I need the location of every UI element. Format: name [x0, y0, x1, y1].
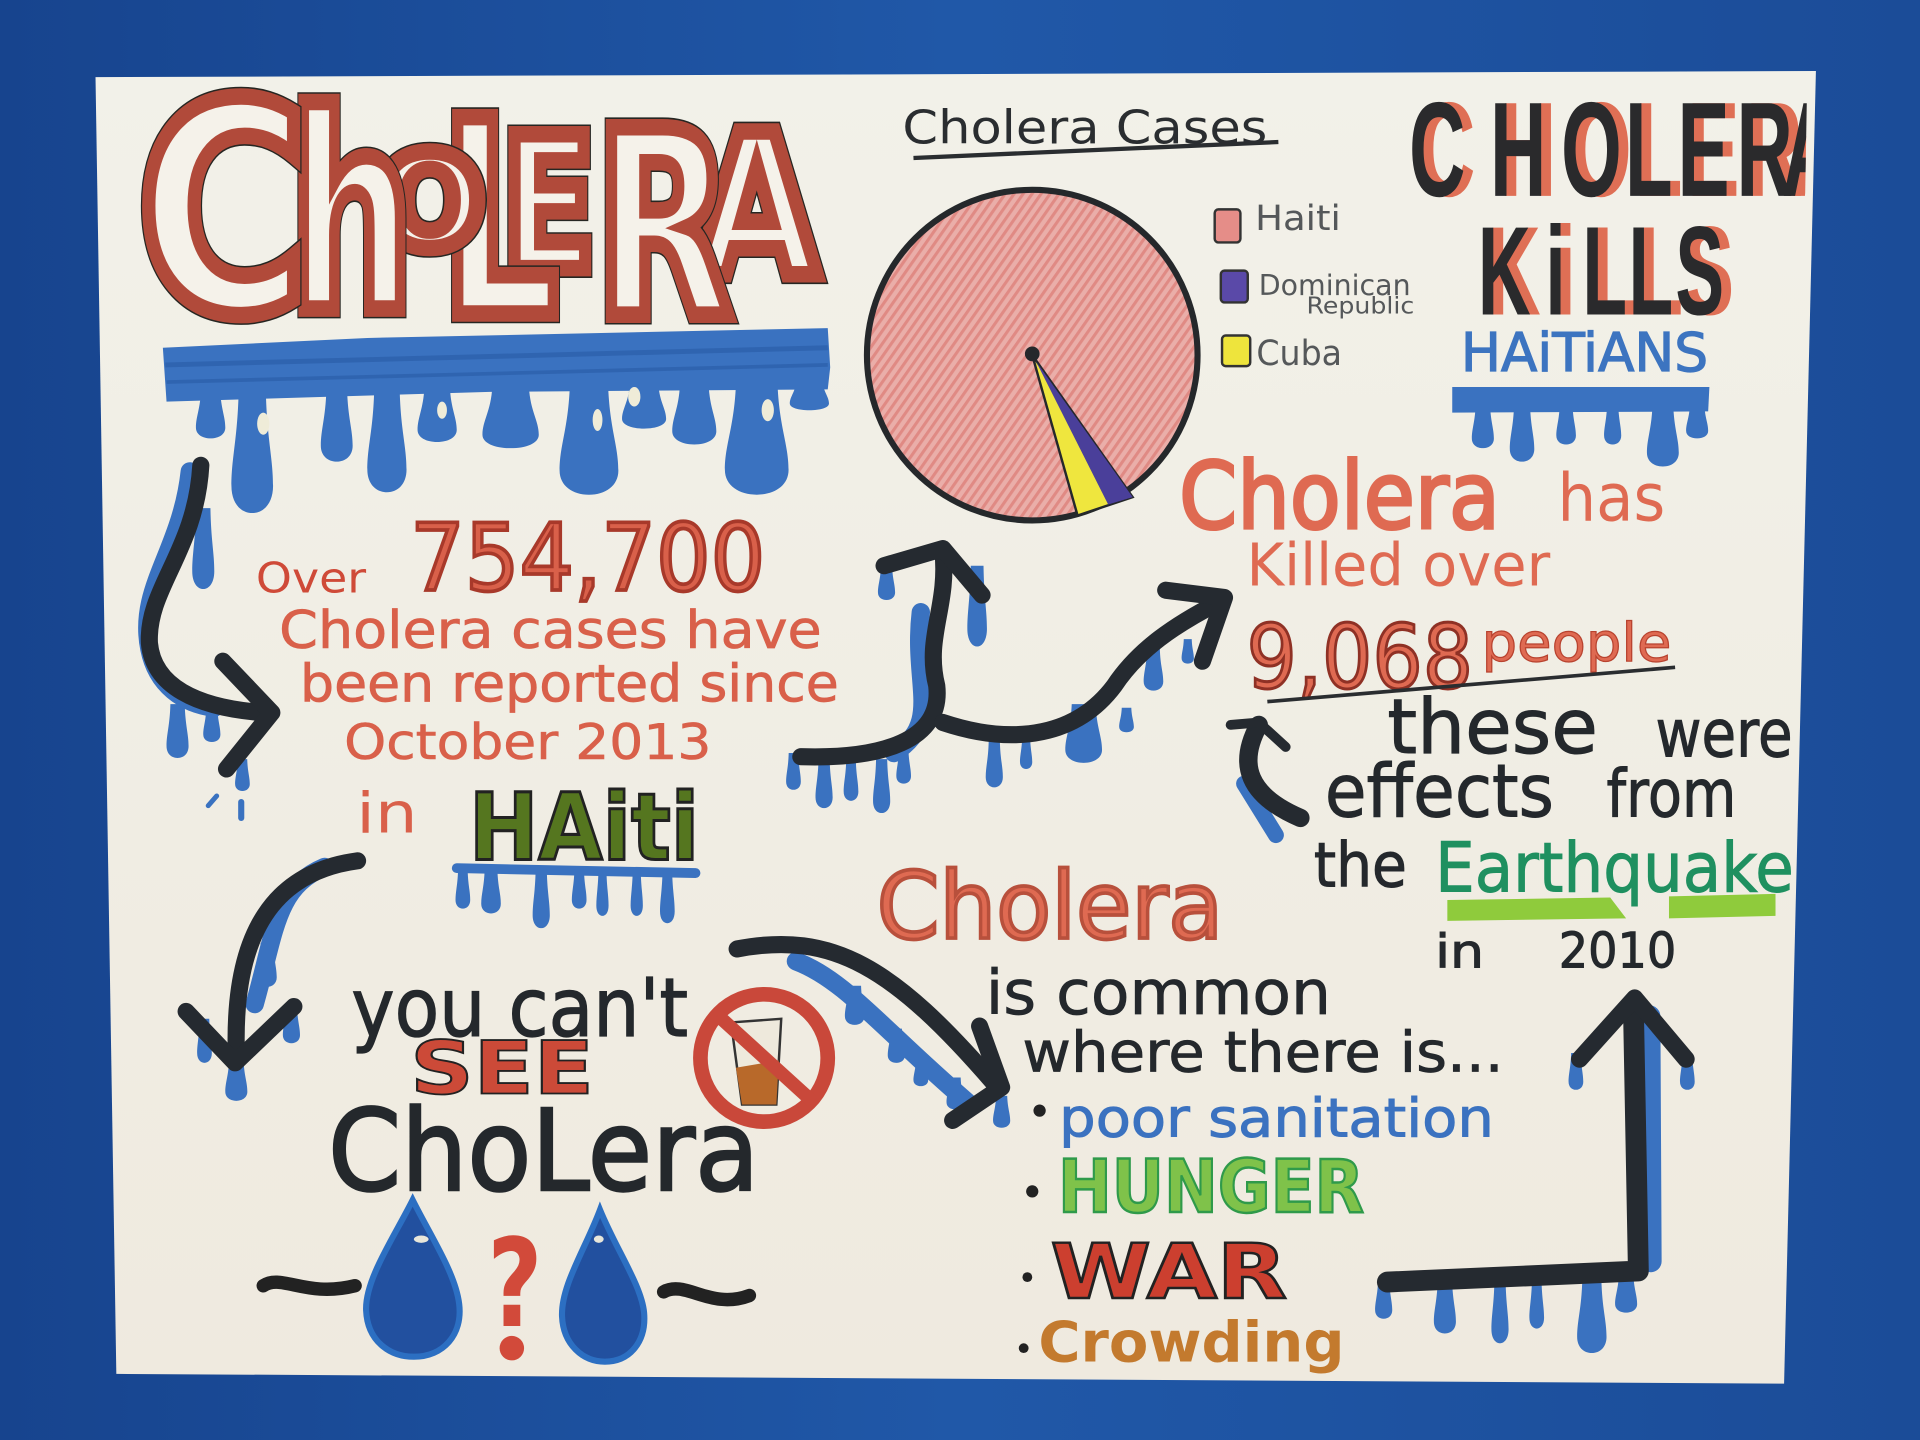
- headline: Cholera kills Haitians: KiLLS: [1488, 201, 1734, 342]
- pie chart: cholera cases: [867, 190, 1198, 520]
- icon: water drops with question mark: [263, 1200, 749, 1362]
- headline: Cholera kills Haitians: CHOLERA: [1409, 75, 1838, 225]
- text: you can't see cholera: you can't: [351, 962, 688, 1056]
- text: cholera is common where there is: is common: [986, 958, 1331, 1029]
- text: these were effects from the Earthquake in 2010: these: [1387, 683, 1598, 771]
- text: these were effects from the Earthquake in 2010: [1314, 683, 1794, 979]
- text: cholera is common where there is: where there is...: [1022, 1020, 1504, 1085]
- text: these were effects from the Earthquake in 2010: were: [1656, 696, 1793, 773]
- heading: Cholera Cases: Cholera Cases: [902, 100, 1267, 154]
- title: Cholera: h: [289, 58, 414, 374]
- arrow: top left curved: [147, 465, 272, 818]
- title: Cholera: E: [502, 99, 595, 312]
- arrow: bottom right upward: [1375, 998, 1695, 1353]
- text: over 754,700 cholera cases: Cholera cases have: [279, 601, 822, 661]
- text: you can't see cholera: SEE: [410, 1026, 594, 1111]
- arrow: centre curved to list: [737, 944, 1010, 1128]
- text: over 754,700 cholera cases: in: [356, 782, 418, 847]
- list: conditions: HUNGER: [1058, 1145, 1364, 1230]
- text: over 754,700 cholera cases: October 2013: [344, 714, 711, 771]
- text: these were effects from the Earthquake in 2010: in: [1435, 924, 1484, 978]
- blue dripping bar under Haitians: [1452, 387, 1709, 467]
- title: Cholera: R: [595, 76, 732, 376]
- title: Cholera: A: [696, 93, 818, 321]
- headline: Cholera kills Haitians: HAiTiANS: [1461, 321, 1708, 384]
- text: Cholera has killed over 9,068 people: [1179, 442, 1675, 709]
- title: Cholera: A: [696, 93, 818, 321]
- text: these were effects from the Earthquake in 2010: Earthquake: [1435, 828, 1794, 908]
- title: Cholera: L: [441, 63, 558, 377]
- text: you can't see cholera: ChoLera: [328, 1085, 759, 1217]
- text: Cholera has killed over 9,068 people: Killed over: [1247, 530, 1551, 599]
- text: Cholera has killed over 9,068 people: people: [1482, 611, 1671, 674]
- blue dripping bar under Haiti: [456, 868, 696, 928]
- title: Cholera: E: [502, 99, 595, 312]
- title: Cholera: h: [289, 58, 414, 374]
- text: over 754,700 cholera cases: Over: [256, 554, 367, 603]
- list: conditions: Crowding: [1038, 1311, 1344, 1376]
- list: conditions: poor sanitation: [1059, 1086, 1494, 1149]
- list: conditions: WAR: [1051, 1228, 1287, 1316]
- title: Cholera: R: [595, 76, 732, 376]
- legend: [1215, 199, 1414, 374]
- arrow: middle wavy up: [786, 549, 987, 813]
- text: over 754,700 cholera cases: [256, 504, 839, 847]
- text: over 754,700 cholera cases: been reported since: [300, 655, 839, 715]
- headline: Cholera kills Haitians: [1412, 102, 1807, 373]
- title: Cholera: C: [137, 44, 309, 380]
- headline: Cholera kills Haitians: KiLLS: [1478, 201, 1724, 342]
- arrow: middle wavy right: [943, 590, 1224, 787]
- arrow: lower left down: [186, 861, 358, 1101]
- blue dripping bar under title: [163, 328, 830, 513]
- word: Haiti: HAiti: [469, 774, 699, 882]
- legend: Haiti: [1255, 199, 1341, 239]
- text: over 754,700 cholera cases: 754,700: [410, 504, 765, 612]
- title: Cholera: L: [441, 63, 558, 377]
- arrow: short curved up: [1231, 722, 1300, 835]
- text: you can't see cholera: [328, 962, 759, 1217]
- text: these were effects from the Earthquake in 2010: from: [1607, 756, 1736, 833]
- legend: Republic: [1307, 292, 1414, 319]
- title: Cholera: O: [376, 129, 484, 277]
- text: these were effects from the Earthquake in 2010: 2010: [1559, 922, 1676, 979]
- title: Cholera: C: [137, 44, 309, 380]
- legend: Cuba: [1256, 334, 1342, 374]
- text: these were effects from the Earthquake in 2010: the: [1314, 831, 1407, 902]
- headline: Cholera kills Haitians: CHOLERA: [1419, 75, 1848, 225]
- text: these were effects from the Earthquake in 2010: effects: [1325, 750, 1554, 835]
- text: cholera is common where there is: Cholera: [877, 852, 1223, 960]
- legend: Dominican: [1259, 269, 1411, 302]
- icon: no drinking water sign: [700, 994, 828, 1122]
- text: Cholera has killed over 9,068 people: 9,068: [1247, 606, 1473, 709]
- text: Cholera has killed over 9,068 people: Cholera: [1179, 442, 1500, 550]
- icon: water drops with question mark: ?: [487, 1212, 542, 1355]
- title: Cholera: [137, 44, 818, 380]
- text: Cholera has killed over 9,068 people: has: [1558, 459, 1665, 536]
- list: conditions: [1019, 1086, 1494, 1376]
- text: cholera is common where there is: [877, 852, 1504, 1085]
- title: Cholera: O: [376, 129, 484, 277]
